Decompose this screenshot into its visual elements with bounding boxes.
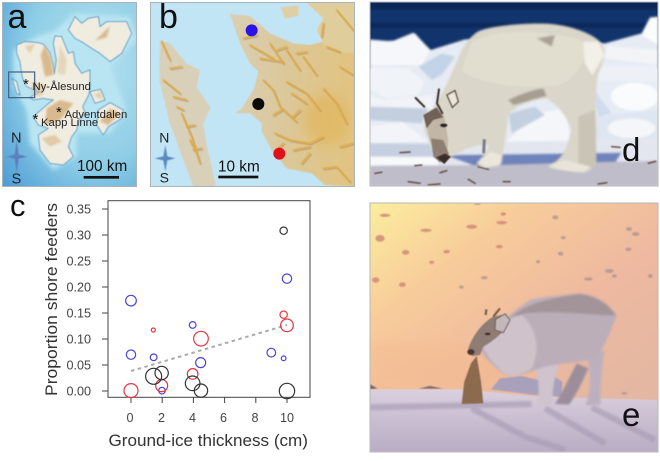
panel b: border	[150, 2, 354, 186]
panel a: border	[2, 2, 136, 186]
map a: mountain shading	[25, 26, 120, 147]
map a: islands	[12, 17, 132, 165]
photo d: snowy ground	[370, 139, 658, 187]
x axis title: Ground-ice thickness (cm)	[108, 431, 308, 450]
map a: scale bar: 100 km	[77, 158, 127, 175]
y axis ticks and labels: 0.25	[66, 254, 91, 268]
x axis ticks and labels: 10	[280, 411, 294, 425]
panel c: letter: c	[10, 188, 26, 223]
black site points	[146, 227, 295, 399]
place label: Ny-Alesund: *	[23, 76, 29, 93]
y axis ticks and labels: 0.05	[66, 358, 91, 372]
panel d: border	[370, 2, 658, 186]
red site points	[124, 311, 293, 398]
map b: land	[159, 3, 357, 187]
panel e: border	[370, 203, 658, 452]
x axis ticks and labels: 6	[220, 411, 227, 425]
x axis ticks and labels: 8	[251, 411, 259, 425]
photo e: long shadows	[370, 404, 655, 450]
panel c: scatter plot	[10, 188, 310, 450]
photo e: horizon glow	[450, 357, 528, 386]
photo d: reindeer	[416, 24, 604, 172]
photo d: seaweed on ground	[375, 147, 656, 185]
y axis ticks and labels	[66, 202, 108, 398]
panel e: photo of reindeer at sunset	[370, 203, 658, 452]
place label: Adventdalen	[56, 104, 127, 121]
y axis ticks and labels: 0.10	[66, 332, 91, 346]
photo e: snow foreground	[370, 389, 658, 452]
photo e: reindeer	[467, 293, 617, 407]
map b: mountain ridges shadows	[163, 11, 354, 183]
photo d: ice field	[370, 17, 659, 147]
plot frame	[108, 201, 310, 397]
map b: black site	[252, 98, 264, 110]
photo d: sea	[370, 2, 658, 69]
photo e: distant cloud of snow	[491, 375, 562, 397]
panel e: letter: e	[622, 396, 640, 433]
map b: compass: N	[159, 130, 169, 146]
x axis ticks and labels: 4	[189, 411, 196, 425]
panel a: Svalbard map	[2, 0, 137, 187]
data points	[124, 227, 295, 399]
y axis ticks and labels: 0.30	[66, 228, 91, 242]
y axis ticks and labels: 0.20	[66, 280, 91, 294]
map b: scale bar: 10 km	[218, 158, 260, 175]
y axis ticks and labels: 0.15	[66, 306, 91, 320]
map b: red site	[273, 148, 285, 160]
map a: shallow water halo	[13, 13, 137, 170]
panel d: letter: d	[622, 131, 640, 168]
map b: mountain ridges	[162, 10, 353, 182]
photo e: sky	[370, 203, 658, 403]
blue site points	[126, 274, 292, 394]
place label: Ny-Alesund	[23, 76, 91, 93]
panel d: photo of reindeer on shore	[370, 2, 659, 187]
place label: Adventdalen: Adventdalen	[64, 109, 127, 121]
map b: compass: S	[160, 169, 169, 185]
place label: Kapp Linne: *	[32, 111, 38, 128]
map a: compass: S	[11, 171, 21, 187]
trend line	[131, 325, 287, 371]
y axis title: Proportion shore feeders	[42, 203, 61, 396]
place label: Kapp Linne: Kapp Linne	[41, 117, 98, 129]
y axis ticks and labels: 0.00	[66, 384, 91, 398]
map b: blue site	[246, 24, 258, 36]
y axis ticks and labels: 0.35	[66, 202, 91, 216]
map a: study area box	[9, 72, 35, 98]
x axis ticks and labels: 0	[126, 411, 134, 425]
map b: compass	[155, 133, 176, 182]
photo e: flying snow specks	[372, 203, 653, 395]
map a: compass	[6, 132, 28, 184]
map b: glow of high ground	[303, 93, 350, 147]
photo e: far hills	[370, 384, 443, 389]
place label: Ny-Alesund: Ny-Ålesund	[32, 80, 91, 93]
panel b: study area map	[150, 0, 357, 187]
photo e: seaweed clump	[462, 356, 483, 404]
x axis ticks and labels	[126, 397, 294, 425]
x axis ticks and labels: 2	[158, 411, 165, 425]
place label: Adventdalen: *	[56, 104, 62, 121]
map a: compass: N	[11, 131, 22, 147]
place label: Kapp Linne	[32, 111, 98, 129]
